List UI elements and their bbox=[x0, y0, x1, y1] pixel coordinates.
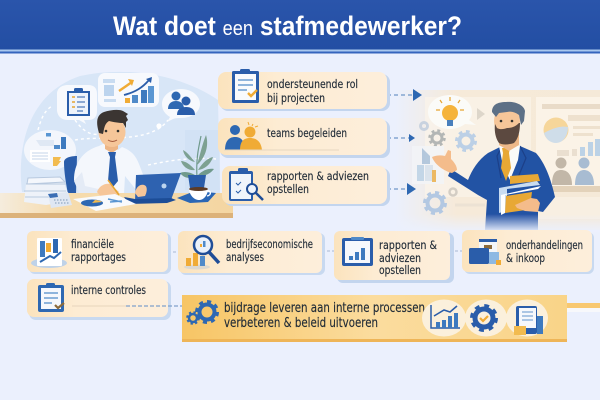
hand at keyboard bbox=[135, 185, 147, 197]
employee writing hand bbox=[97, 184, 119, 198]
plant bbox=[180, 135, 214, 188]
banner: bijdrage leveren aan interne processen bbox=[224, 301, 425, 316]
faded bar chart bbox=[412, 146, 444, 184]
card: teams begeleiden bbox=[218, 118, 390, 158]
desk bbox=[0, 193, 233, 218]
icon: clipboard with check bbox=[232, 69, 259, 103]
employee shirt bbox=[74, 142, 147, 194]
connector: bottom row bbox=[168, 251, 462, 252]
card: financiele rapportages bbox=[27, 231, 171, 274]
icon: team bbox=[224, 122, 339, 150]
card: bedrijfseconomische analyses bbox=[178, 231, 325, 275]
card: ondersteunende rol bbox=[218, 69, 390, 111]
card: ondersteunende rol: bij projecten bbox=[267, 91, 325, 105]
card: teams begeleiden: teams begeleiden bbox=[267, 126, 347, 140]
banner bbox=[182, 295, 567, 342]
card: rapporten en adviezen opstellen: opstellen bbox=[267, 182, 309, 196]
employee hair bbox=[97, 110, 128, 134]
bubble: report bbox=[24, 130, 76, 170]
connector: controles to banner bbox=[126, 305, 182, 307]
laptop bbox=[124, 173, 181, 204]
icon: clipboard with magnifier bbox=[229, 168, 263, 201]
manager raised hand bbox=[432, 150, 457, 173]
card: interne controles bbox=[27, 279, 171, 320]
manager hair bbox=[492, 102, 525, 125]
icon: magnifier with bars bbox=[184, 236, 219, 270]
gears bbox=[420, 122, 485, 214]
manager tie bbox=[501, 148, 511, 181]
card: rapporten en adviezen opstellen (bottom): opstellen bbox=[379, 263, 421, 277]
manager suit bbox=[448, 146, 555, 230]
icon: gear with check bbox=[465, 300, 507, 336]
manager neck and face bbox=[499, 134, 519, 151]
banner: verbeteren & beleid uitvoeren bbox=[224, 316, 378, 331]
chair bbox=[64, 156, 77, 194]
tie bbox=[108, 152, 118, 187]
icon: briefcase bbox=[469, 239, 501, 265]
card: financiele rapportages: rapportages bbox=[71, 250, 126, 264]
illustration: employee at desk bbox=[0, 72, 233, 218]
icon: growth chart bbox=[422, 300, 466, 336]
calculator bbox=[48, 192, 72, 208]
bubble: growth chart bbox=[98, 73, 159, 107]
connector arrows: top cards to speaker bbox=[387, 89, 422, 195]
card: onderhandelingen en inkoop bbox=[462, 230, 594, 274]
back wall bbox=[395, 90, 600, 230]
illustration: manager presenting bbox=[395, 90, 600, 232]
icon: clipboard check bbox=[38, 283, 64, 312]
folders bbox=[499, 174, 541, 215]
bottom fade bbox=[395, 214, 600, 232]
bubble: people bbox=[162, 89, 200, 122]
side stripe bbox=[567, 303, 600, 312]
card: interne controles: interne controles bbox=[71, 283, 146, 297]
icon: report chart bbox=[31, 238, 67, 268]
icon: gears bbox=[187, 302, 218, 324]
idea bubble bbox=[428, 95, 476, 129]
coffee bbox=[177, 187, 216, 203]
card: rapporten en adviezen opstellen bbox=[222, 166, 390, 206]
card: bedrijfseconomische analyses: analyses bbox=[226, 250, 264, 264]
document on desk bbox=[73, 194, 136, 211]
title: Wat doet een stafmedewerker? bbox=[113, 11, 462, 41]
icon: clipboard bar chart bbox=[342, 237, 373, 266]
card: rapporten en adviezen opstellen (bottom): rapporten & bbox=[379, 238, 437, 252]
card: ondersteunende rol: ondersteunende rol bbox=[267, 77, 358, 91]
card: financiele rapportages: financiële bbox=[71, 237, 114, 251]
neck bbox=[105, 142, 118, 153]
card: rapporten en adviezen opstellen (bottom) bbox=[334, 231, 454, 283]
card: onderhandelingen en inkoop: & inkoop bbox=[506, 251, 545, 265]
manager shirt bbox=[499, 146, 520, 180]
paper stack bbox=[24, 177, 70, 205]
card: rapporten en adviezen opstellen (bottom): adviezen bbox=[379, 251, 421, 265]
header band bbox=[0, 0, 600, 54]
bubble: clipboard bbox=[57, 85, 97, 124]
background blob bbox=[21, 72, 220, 195]
icon: document with folder bbox=[506, 300, 548, 336]
manager beard bbox=[495, 123, 520, 144]
employee head bbox=[98, 117, 126, 147]
card: rapporten en adviezen opstellen: rapporten & adviezen bbox=[267, 169, 369, 183]
card: bedrijfseconomische analyses: bedrijfseconomische bbox=[226, 237, 313, 251]
